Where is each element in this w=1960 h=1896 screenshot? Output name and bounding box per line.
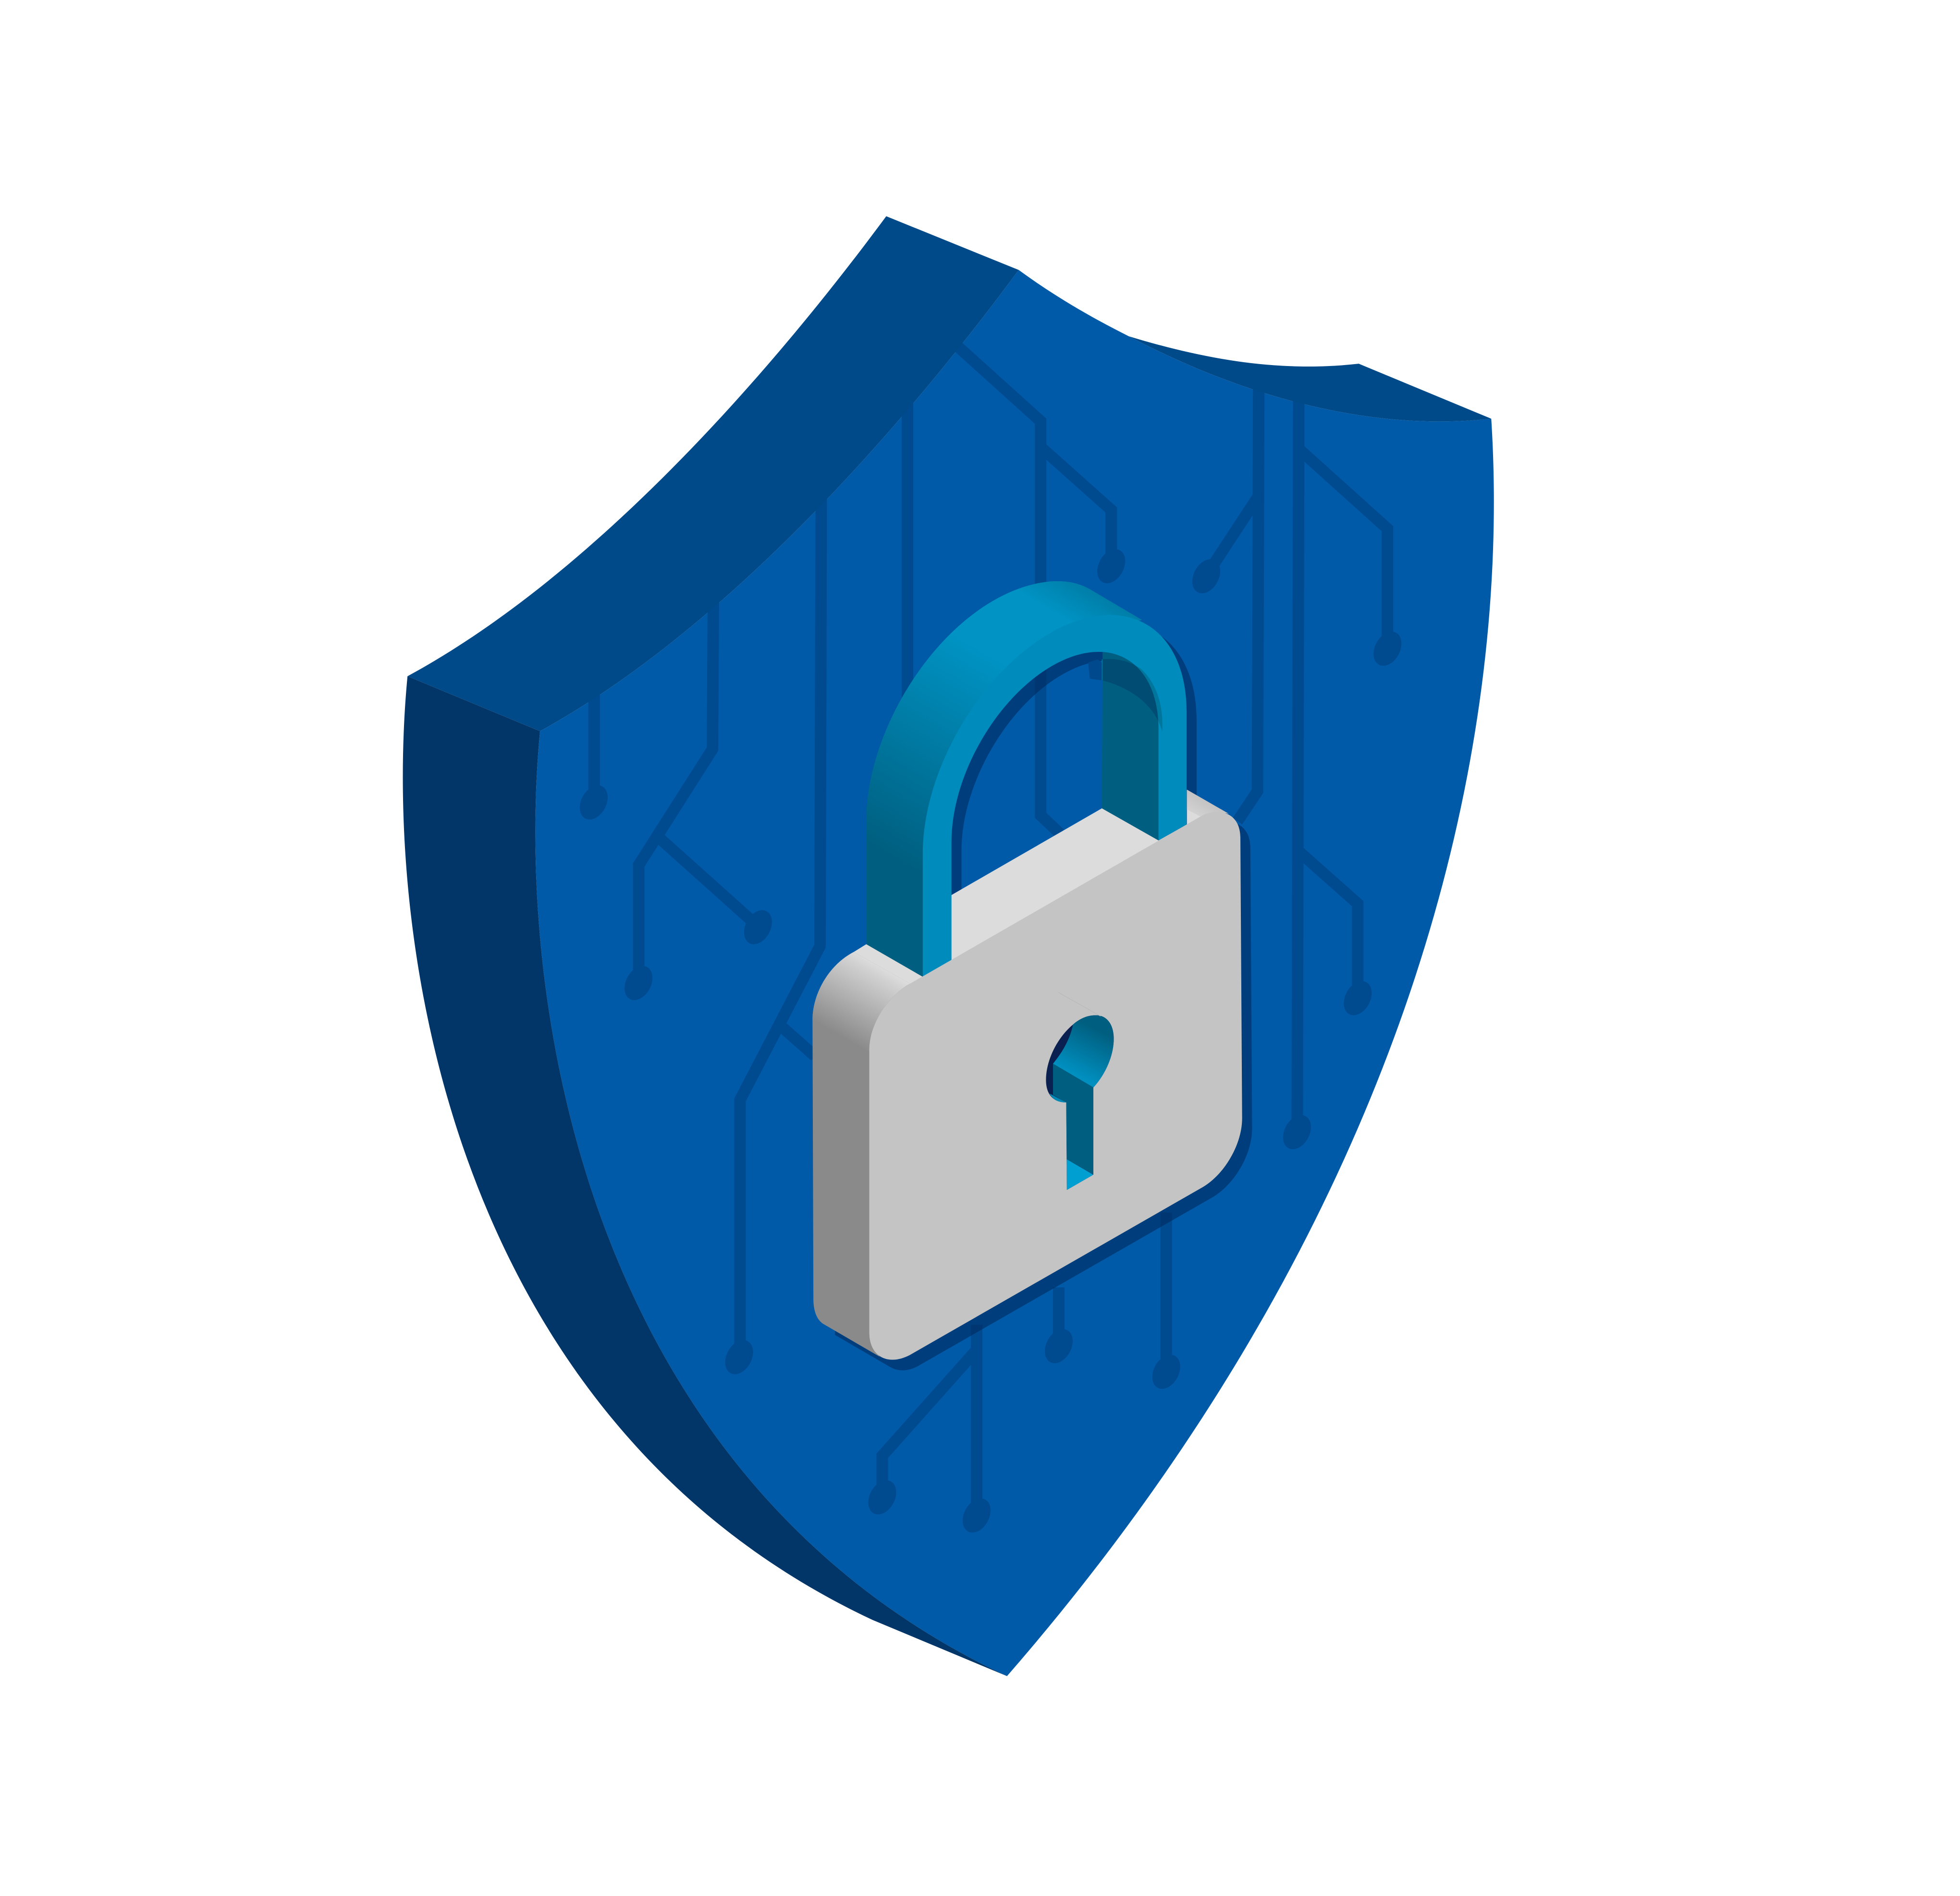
trace: left branching bbox=[639, 598, 755, 981]
trace: far left bbox=[592, 694, 596, 800]
shackle: inner right wall bbox=[1102, 652, 1159, 841]
circuit nodes bbox=[574, 544, 1407, 1537]
keyhole: upper teal wall bbox=[1053, 1015, 1114, 1088]
shackle: cast shadow on inner wall bbox=[1102, 659, 1158, 721]
shackle: cast shadow on blue opening bbox=[1088, 660, 1102, 680]
body: back-right top bevel bbox=[1187, 790, 1229, 817]
illustration: isometric shield with padlock bbox=[403, 216, 1494, 1676]
trace: bottom short bbox=[1056, 1287, 1061, 1345]
padlock bbox=[812, 581, 1242, 1360]
trace: bottom left branching bbox=[882, 1325, 977, 1515]
keyhole: small lower lip bbox=[1049, 1093, 1066, 1102]
shadow: body bbox=[835, 822, 1252, 1370]
padlock shadow on shield bbox=[835, 624, 1252, 1370]
trace: center left bbox=[905, 397, 910, 706]
trace: right inner bbox=[1208, 381, 1259, 821]
circuit traces on shield bbox=[594, 346, 1387, 1515]
body: front face bbox=[869, 812, 1242, 1360]
body: rounded shoulder bbox=[812, 952, 910, 1051]
shackle: front face bbox=[923, 615, 1187, 977]
trace: bottom right bbox=[1164, 1212, 1168, 1371]
body: top surface bbox=[854, 790, 1231, 984]
trace: top center bbox=[957, 346, 1111, 834]
shackle: top shading bbox=[998, 581, 1142, 637]
keyhole bbox=[1046, 992, 1114, 1190]
shield: top-right edge bbox=[1129, 336, 1491, 421]
keyhole: lower teal wall bbox=[1053, 1064, 1093, 1174]
keyhole: bright floor bbox=[1067, 1159, 1093, 1190]
keyhole: hairline bbox=[1058, 992, 1101, 1016]
shadow: shackle bbox=[933, 624, 1197, 986]
shield: front face bbox=[535, 270, 1494, 1676]
keyhole: dark opening bbox=[1046, 1015, 1114, 1190]
shield: top-left edge bbox=[407, 216, 1019, 731]
trace: long left bbox=[740, 498, 821, 1356]
shackle: cast shadow over front edge bbox=[1102, 659, 1163, 732]
shield: left side edge bbox=[403, 676, 1007, 1676]
trace: right long bbox=[1297, 397, 1387, 1131]
body: left side wall bbox=[812, 952, 910, 1357]
shackle: outer side wall bbox=[866, 581, 1142, 977]
